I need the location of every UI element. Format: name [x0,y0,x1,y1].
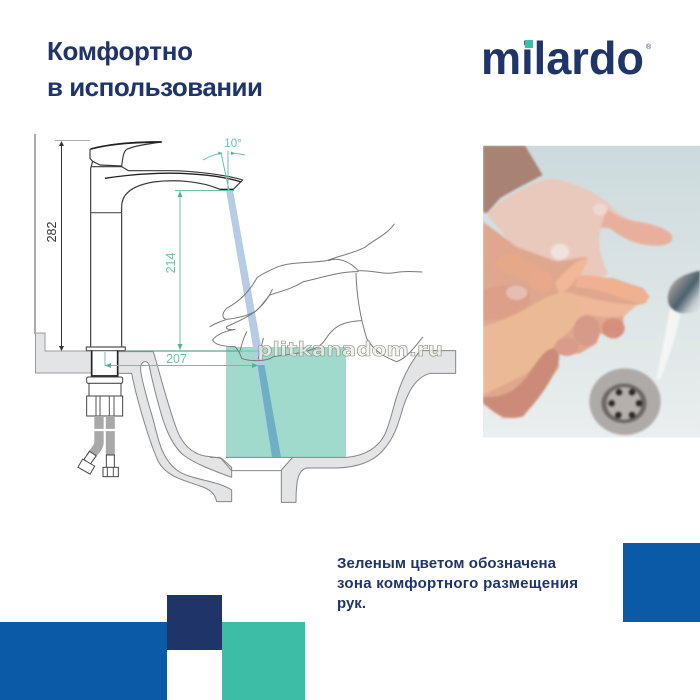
logo: milardo: ® [646,43,652,51]
dimension: spout angle 10 degrees [203,138,245,190]
basin right section [210,351,456,502]
decorative blocks: bottom left [0,595,305,700]
photo: hands washing under faucet [483,146,700,438]
watermark: plitkanadom.ru [257,338,443,361]
faucet spout and column [91,161,243,347]
hoses [78,416,118,477]
dimension: spout angle 10 degrees: 10° [224,138,242,150]
stem [92,351,118,376]
faucet lever [90,142,162,166]
faucet fittings and hoses [78,351,123,477]
dimension: spout height 214: 214 [164,253,178,273]
dimension: overall height 282 [45,140,90,351]
logo: milardo: milardo [481,32,644,84]
water stream [226,190,281,457]
dimension: reach 207: 207 [166,352,187,366]
caption: рук. [337,595,366,612]
basin left section [118,352,232,502]
hands outline [210,224,423,362]
caption: Зеленым цветом обозначена [337,555,557,572]
decorative block: blue right [623,543,700,622]
faucet body [86,142,243,351]
title: Комфортно [47,36,193,66]
dimension: reach 207 [105,351,262,368]
dimension: overall height 282: 282 [45,222,59,242]
wall line [34,134,36,334]
nut [87,377,123,416]
comfort zone [226,347,346,457]
caption: зона комфортного размещения [337,575,578,592]
dimension: spout height 214 [164,190,234,350]
faucet flange [86,347,125,351]
left wall and countertop [36,134,92,373]
title: в использовании [47,72,263,102]
